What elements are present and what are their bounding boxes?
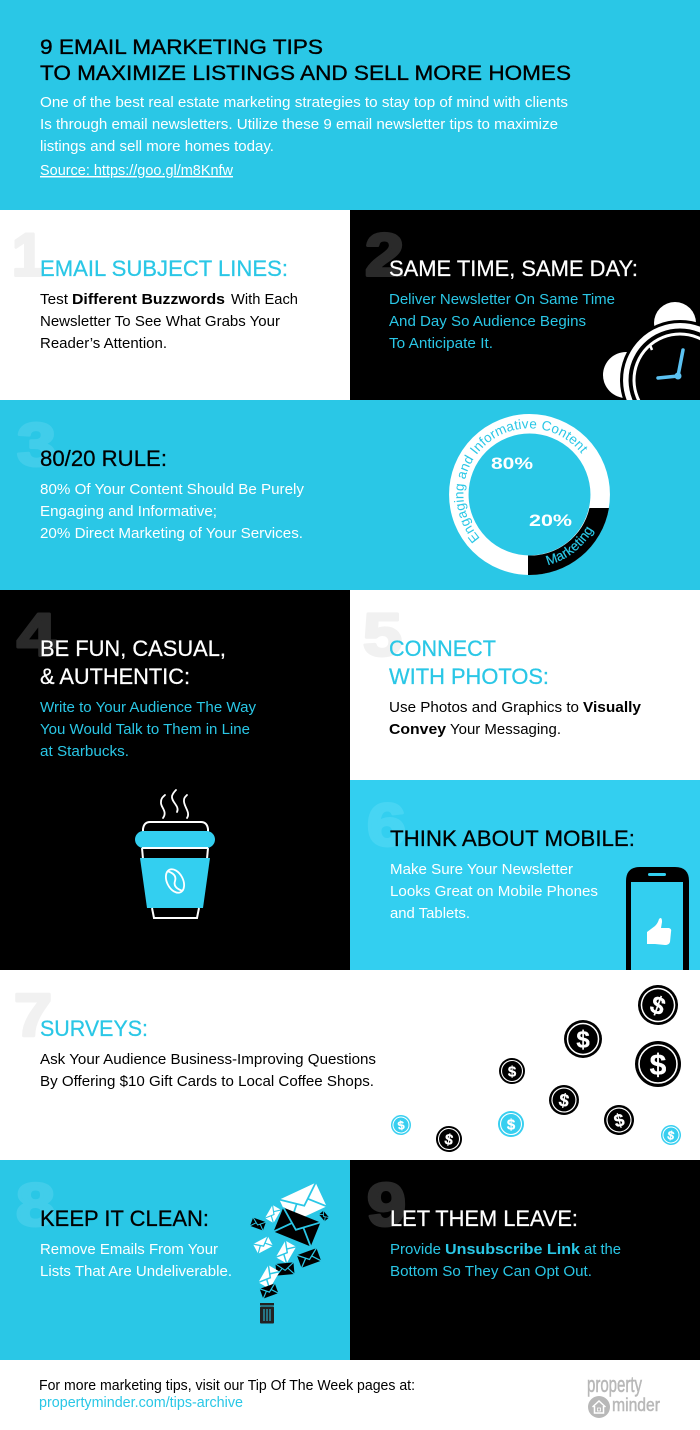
body text: Different Buzzwords	[72, 291, 225, 308]
panel: header	[0, 0, 700, 210]
title: 9 EMAIL MARKETING TIPS	[40, 36, 323, 59]
heading	[40, 636, 226, 689]
donut chart: Marketing	[546, 526, 594, 566]
body text	[389, 699, 642, 738]
body text: Convey	[389, 721, 447, 738]
heading	[389, 636, 549, 689]
heading: SAME TIME, SAME DAY:	[389, 256, 638, 281]
icon: phone with thumbs up	[626, 867, 689, 970]
body text: Provide	[390, 1242, 441, 1258]
intro text	[40, 95, 568, 155]
panel: tip 4	[0, 590, 350, 970]
body text	[40, 291, 298, 352]
number 7: 7	[14, 982, 52, 1048]
icon: dollar coins: $	[646, 990, 669, 1022]
heading: THINK ABOUT MOBILE:	[390, 826, 635, 851]
body text	[40, 1242, 232, 1280]
body text	[389, 292, 615, 352]
body text: 20% Direct Marketing of Your Services.	[40, 526, 303, 542]
heading: LET THEM LEAVE:	[390, 1206, 578, 1231]
icon: dollar coins: $	[443, 1131, 455, 1149]
panel: tip 7	[0, 970, 700, 1160]
body text: With Each	[231, 292, 298, 308]
body text: Remove Emails From Your	[40, 1242, 218, 1258]
body text: Unsubscribe Link	[445, 1241, 581, 1258]
donut chart: Engaging and Informative Content	[454, 419, 588, 544]
body text: at Starbucks.	[40, 744, 129, 760]
title	[40, 36, 571, 85]
icon: coffee cup	[135, 790, 215, 918]
body text: Deliver Newsletter On Same Time	[389, 292, 615, 308]
body text: at the	[584, 1242, 621, 1258]
number 3: 3	[17, 412, 56, 478]
number 2: 2	[365, 222, 404, 288]
panel: tip 1	[0, 210, 350, 400]
intro text: Is through email newsletters. Utilize these 9 email newsletter tips to maximize	[40, 117, 558, 133]
number 4: 4	[17, 602, 57, 668]
icon: dollar coins: $	[508, 1064, 517, 1080]
number 1: 1	[12, 222, 44, 288]
body text: Reader’s Attention.	[40, 336, 167, 352]
donut chart: 80%	[491, 454, 533, 473]
logo: property	[587, 1372, 642, 1397]
icon: dollar coins: $	[397, 1118, 406, 1133]
icon: envelopes falling into trash	[250, 1183, 329, 1324]
panel: footer	[0, 1360, 700, 1430]
icon: dollar coins: $	[576, 1026, 590, 1054]
intro text: One of the best real estate marketing strategies to stay top of mind with clients	[40, 95, 568, 111]
footer link: propertyminder.com/tips-archive	[39, 1395, 243, 1411]
footer text: For more marketing tips, visit our Tip Of The Week pages at:	[39, 1378, 415, 1394]
body text	[40, 700, 257, 760]
panel: tip 9	[350, 1160, 700, 1360]
number 9: 9	[367, 1172, 406, 1238]
body text: Ask Your Audience Business-Improving Questions	[40, 1052, 376, 1068]
body text: Engaging and Informative;	[40, 504, 217, 520]
donut chart: 20%	[529, 511, 572, 530]
heading: EMAIL SUBJECT LINES:	[40, 256, 288, 281]
heading: KEEP IT CLEAN:	[40, 1206, 209, 1231]
number 6: 6	[367, 792, 406, 858]
body text	[390, 862, 598, 922]
panel: tip 8	[0, 1160, 350, 1360]
body text: Newsletter To See What Grabs Your	[40, 314, 280, 330]
intro text: listings and sell more homes today.	[40, 139, 274, 155]
body text: Write to Your Audience The Way	[40, 700, 257, 716]
logo: minder	[612, 1395, 660, 1415]
number 5: 5	[363, 602, 402, 668]
heading: CONNECT	[389, 636, 496, 661]
number 8: 8	[16, 1172, 55, 1238]
body text: Bottom So They Can Opt Out.	[390, 1264, 592, 1280]
panel: tip 6	[350, 780, 700, 970]
icon: dollar coins: $	[650, 1049, 667, 1082]
source link: Source: https://goo.gl/m8Knfw	[40, 163, 234, 179]
heading: 80/20 RULE:	[40, 446, 167, 471]
icon: dollar coins	[389, 979, 684, 1154]
body text: Visually	[583, 699, 642, 716]
icon: dollar coins: $	[507, 1116, 516, 1134]
heading: WITH PHOTOS:	[389, 664, 549, 689]
body text: Looks Great on Mobile Phones	[390, 884, 598, 900]
panel: tip 3	[0, 400, 700, 590]
heading: SURVEYS:	[40, 1016, 148, 1041]
body text: You Would Talk to Them in Line	[40, 722, 250, 738]
body text	[40, 1052, 376, 1090]
body text: 80% Of Your Content Should Be Purely	[40, 482, 305, 498]
icon: dollar coins: $	[666, 1128, 676, 1143]
icon: alarm clock	[603, 302, 700, 400]
body text: To Anticipate It.	[389, 336, 493, 352]
body text: Test	[40, 292, 68, 308]
heading: BE FUN, CASUAL,	[40, 636, 226, 661]
body text: and Tablets.	[390, 906, 470, 922]
heading: & AUTHENTIC:	[40, 664, 190, 689]
body text: By Offering $10 Gift Cards to Local Coffee Shops.	[40, 1074, 374, 1090]
body text: Your Messaging.	[450, 722, 561, 738]
icon: dollar coins: $	[612, 1110, 627, 1131]
body text	[390, 1241, 621, 1280]
body text: And Day So Audience Begins	[389, 314, 586, 330]
body text: Lists That Are Undeliverable.	[40, 1264, 232, 1280]
logo	[587, 1372, 660, 1418]
icon: dollar coins: $	[557, 1090, 571, 1111]
panel: tip 2	[350, 210, 700, 440]
title: TO MAXIMIZE LISTINGS AND SELL MORE HOMES	[40, 62, 571, 85]
body text	[40, 482, 305, 542]
donut chart	[449, 414, 610, 575]
body text: Make Sure Your Newsletter	[390, 862, 573, 878]
body text: Use Photos and Graphics to	[389, 700, 579, 716]
panel: tip 5	[350, 590, 700, 780]
